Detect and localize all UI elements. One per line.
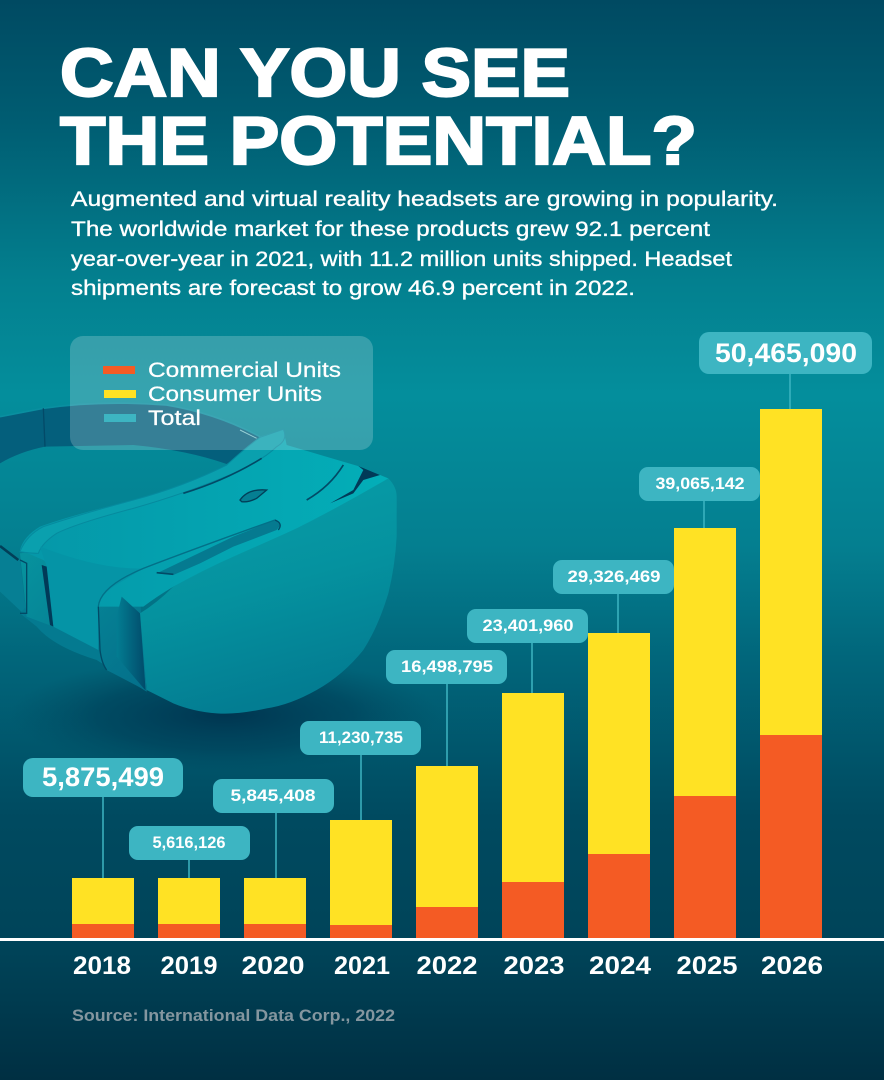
title <box>60 35 697 179</box>
bar 2021: 11,230,735 <box>319 728 403 747</box>
x axis year labels: 2019 <box>160 952 218 980</box>
legend: consumer units <box>104 383 322 406</box>
headset side body <box>20 543 145 690</box>
x axis year labels: 2020 <box>242 952 304 980</box>
intro paragraph: shipments are forecast to grow 46.9 percent in 2022. <box>71 277 635 300</box>
title: CAN YOU SEE <box>60 35 570 111</box>
footer band <box>0 940 884 1080</box>
legend: commercial units: Commercial Units <box>148 359 341 382</box>
title: THE POTENTIAL? <box>60 103 697 179</box>
headset front shell <box>140 478 397 714</box>
headset shadow <box>10 657 440 773</box>
legend: total <box>104 407 201 430</box>
stacked bar chart <box>23 332 872 938</box>
bar 2022 <box>386 650 507 938</box>
bar 2019: 5,616,126 <box>152 833 226 852</box>
headset dark side panel <box>117 597 146 691</box>
bar 2026: 50,465,090 <box>715 338 857 368</box>
bar 2024 <box>553 560 674 938</box>
legend: total: Total <box>148 407 201 430</box>
x axis year labels: 2024 <box>589 952 651 980</box>
intro paragraph: Augmented and virtual reality headsets are growing in popularity. <box>71 188 778 211</box>
x axis year labels: 2022 <box>416 952 478 980</box>
bar 2025: 39,065,142 <box>656 474 744 493</box>
x axis line <box>0 938 884 941</box>
x axis year labels: 2026 <box>761 952 823 980</box>
source note: Source: International Data Corp., 2022 <box>72 1006 395 1025</box>
bar 2018: 5,875,499 <box>42 762 164 792</box>
bar 2019 <box>129 826 250 938</box>
x axis year labels: 2021 <box>334 952 390 980</box>
x axis year labels: 2025 <box>676 952 738 980</box>
x axis year labels <box>73 952 823 980</box>
headset lower side <box>20 563 147 692</box>
headset vents and seams <box>20 458 380 670</box>
bar 2025 <box>639 467 760 938</box>
headset left strap <box>0 547 27 617</box>
legend: consumer units: Consumer Units <box>148 383 322 406</box>
bar 2022: 16,498,795 <box>401 657 493 676</box>
bar 2026 <box>699 332 872 938</box>
intro paragraph <box>71 188 778 300</box>
headset frame panel <box>40 547 143 650</box>
bar 2023 <box>467 609 588 938</box>
headset dial <box>240 490 267 502</box>
bar 2024: 29,326,469 <box>568 567 660 586</box>
bar 2023: 23,401,960 <box>482 616 574 635</box>
bar 2021 <box>300 721 421 938</box>
bar 2020 <box>213 779 334 938</box>
headset strap <box>0 403 260 464</box>
icon: VR headset <box>0 403 397 714</box>
legend: commercial units <box>103 359 341 382</box>
intro paragraph: year-over-year in 2021, with 11.2 million units shipped. Headset <box>71 248 732 271</box>
headset brow ridge <box>20 429 285 553</box>
x axis year labels: 2023 <box>504 952 564 980</box>
legend <box>70 336 373 450</box>
headset top surface <box>20 429 388 607</box>
bar 2018 <box>23 758 183 938</box>
intro paragraph: The worldwide market for these products grew 92.1 percent <box>71 218 710 241</box>
bar 2020: 5,845,408 <box>230 786 316 805</box>
x axis year labels: 2018 <box>73 952 131 980</box>
